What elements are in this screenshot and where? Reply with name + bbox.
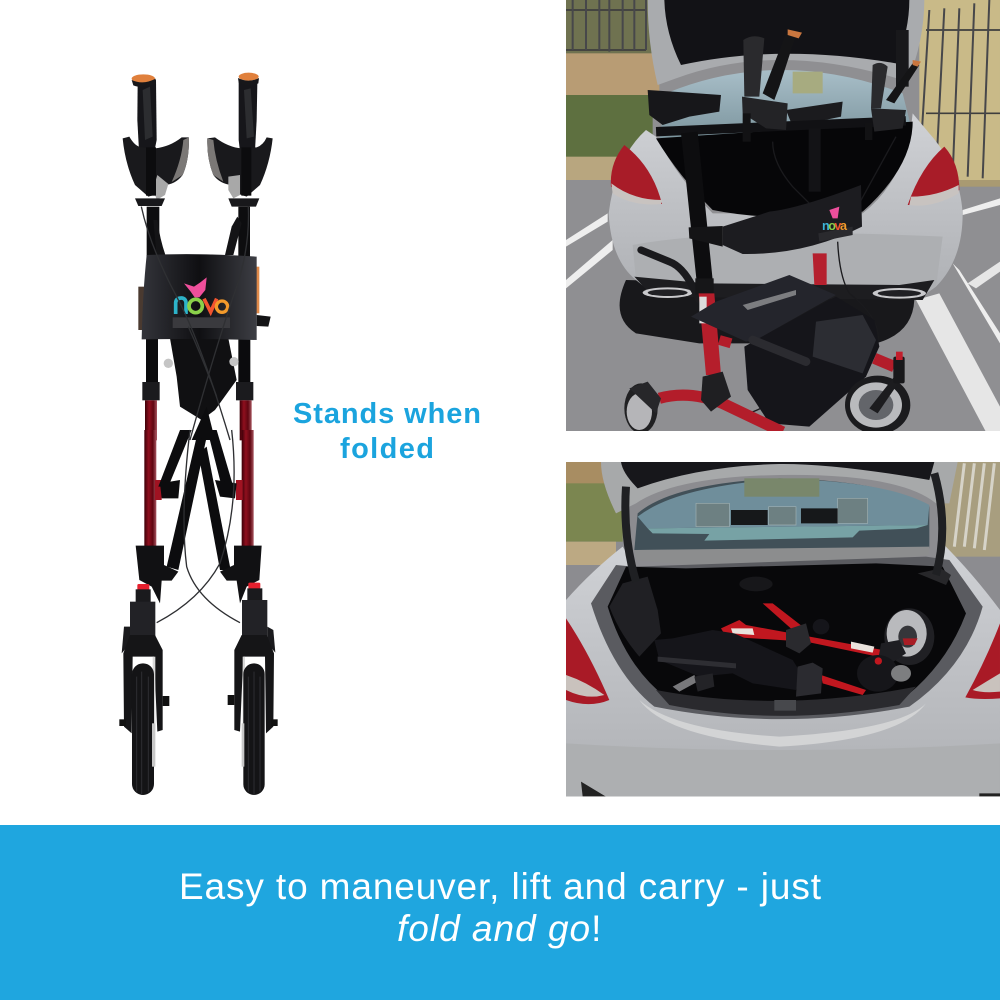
footer text: !	[591, 908, 601, 949]
parking lot background	[566, 0, 1000, 432]
folding latches	[164, 357, 239, 368]
nova logo	[176, 277, 228, 314]
silver car body	[566, 546, 1000, 750]
tail light right	[908, 147, 959, 205]
open trunk lid	[648, 0, 924, 87]
walker: red front post	[699, 293, 721, 375]
upright posts	[142, 207, 253, 440]
walker: storage basket	[744, 297, 879, 427]
bumper lip	[656, 687, 916, 716]
footer banner	[0, 825, 1000, 1000]
footer text: fold and go	[397, 908, 591, 949]
right hand grip with orange cap	[238, 73, 259, 157]
background	[566, 462, 1000, 610]
silver car body	[609, 113, 963, 298]
lower bumper	[566, 743, 1000, 798]
rear bumper and exhausts	[634, 277, 934, 300]
seat sling storage bag	[170, 338, 237, 420]
carpet side	[609, 577, 661, 657]
photo: folded walker standing, front view	[119, 73, 278, 795]
walker: back support with nova logo: nova	[822, 219, 848, 233]
left hand grip with orange cap	[132, 74, 157, 157]
footer text: Easy to maneuver, lift and carry - just	[179, 866, 822, 907]
walker: brake cables	[739, 137, 896, 417]
walker: seat	[691, 275, 836, 342]
walker: right front wheel	[845, 352, 910, 434]
walker: black post	[681, 132, 713, 282]
photo: walker upright behind car trunk	[566, 0, 1000, 434]
tail light left	[566, 618, 609, 704]
right arm cuff	[207, 137, 273, 207]
tail light right	[965, 623, 1000, 699]
photo: walker folded inside car trunk	[566, 460, 1000, 798]
walker: left rear wheel	[624, 382, 661, 433]
caption: stands when folded: folded	[340, 433, 434, 465]
X folding brace top	[192, 407, 215, 440]
rear window	[659, 70, 913, 140]
left caster assembly	[119, 546, 178, 795]
walker: red rear post	[813, 253, 827, 285]
walker: handle bar	[753, 340, 806, 362]
walker: corner joint	[701, 372, 731, 412]
brake cables upper	[141, 207, 249, 440]
walker: forearm cuffs and grips	[648, 29, 921, 192]
car shadow	[620, 280, 914, 343]
rear window	[634, 478, 929, 550]
spoked wheel	[884, 608, 934, 665]
walker upper half	[123, 73, 273, 440]
trunk interior	[608, 563, 966, 710]
black X brace	[158, 430, 237, 570]
open trunk interior	[656, 122, 913, 217]
walker: post collar	[695, 278, 714, 284]
brake cables lower	[157, 430, 240, 623]
walker: back support with nova logo	[689, 185, 862, 254]
red frame tubes	[144, 430, 254, 547]
walker: hand brake handle	[641, 250, 699, 300]
caption: stands when folded: Stands when	[293, 398, 481, 430]
tail light left	[611, 145, 662, 204]
trunk gasket rim	[591, 557, 983, 719]
trunk lid struts	[625, 473, 942, 582]
back support pad	[142, 254, 257, 340]
right caster assembly	[220, 546, 278, 795]
trunk lid outer	[601, 462, 958, 513]
folded walker	[654, 577, 934, 697]
side pouch accents	[138, 267, 271, 330]
walker: red lower frame	[659, 340, 894, 432]
walker lower half	[119, 430, 278, 795]
parcel shelf	[640, 546, 930, 550]
left arm cuff	[123, 137, 189, 206]
